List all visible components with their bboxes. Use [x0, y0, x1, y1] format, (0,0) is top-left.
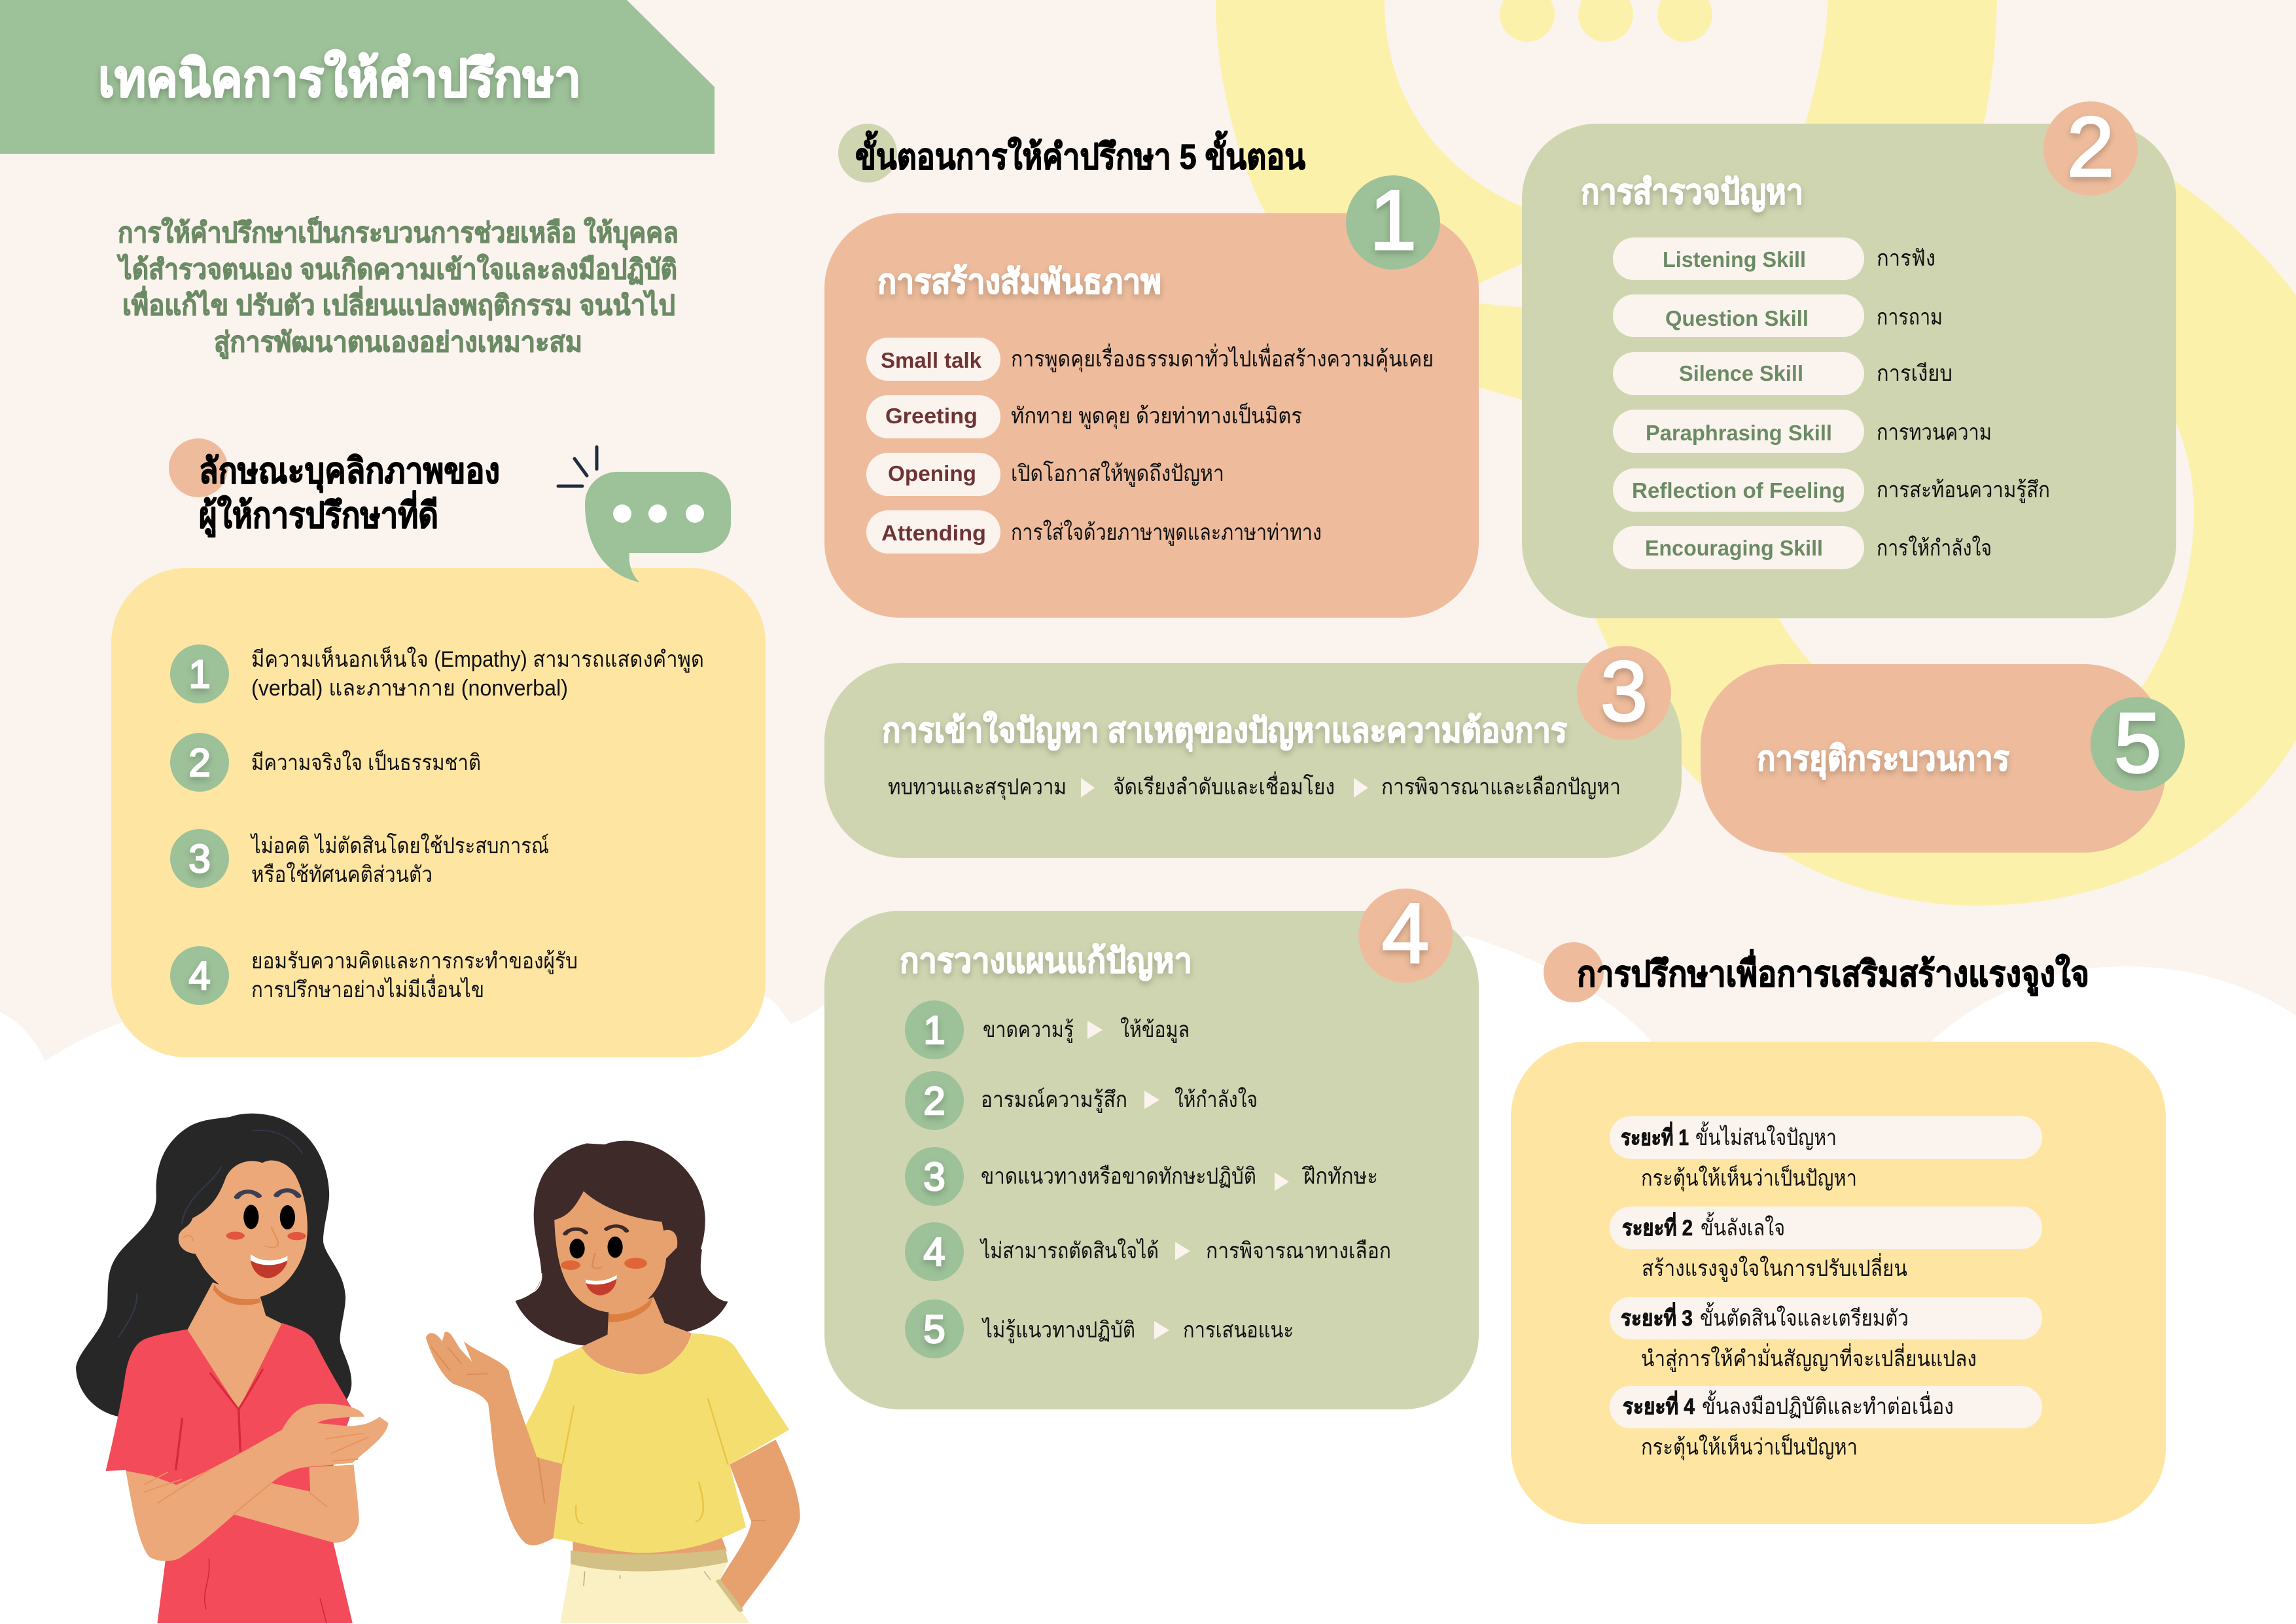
background: cream area with cloud edge	[0, 0, 2296, 1112]
stage 1: กระตุ้นให้เห็นว่าเป็นปัญหา	[1641, 1165, 1857, 1192]
item 1: 1	[188, 652, 211, 696]
step 2 rows: การทวนความ	[1877, 420, 1992, 445]
panel: step 1	[824, 172, 1479, 618]
intro paragraph: สู่การพัฒนาตนเองอย่างเหมาะสม	[214, 327, 582, 359]
stage 1: ระยะที่ 1	[1621, 1121, 1689, 1150]
item 3: หรือใช้ทัศนคติส่วนตัว	[251, 862, 433, 887]
panel: step 5	[1701, 664, 2185, 853]
item 3	[170, 829, 549, 888]
step 3 badge	[1577, 643, 1671, 740]
row 3	[905, 1147, 1378, 1206]
item 4: 4	[188, 954, 211, 998]
step 2 rows: การให้กำลังใจ	[1877, 535, 1992, 561]
intro paragraph: เพื่อแก้ไข ปรับตัว เปลี่ยนแปลงพฤติกรรม จนนำไป	[122, 286, 675, 321]
row 4	[905, 1222, 1391, 1281]
item 3: ไม่อคติ ไม่ตัดสินโดยใช้ประสบการณ์	[249, 833, 549, 858]
row 3: ขาดแนวทางหรือขาดทักษะปฏิบัติ	[981, 1164, 1256, 1189]
step 2 rows: Silence Skill	[1679, 361, 1803, 385]
item 2: 2	[188, 741, 211, 785]
step 3 flow: การพิจารณาและเลือกปัญหา	[1381, 775, 1621, 800]
heading: good counsellor traits	[169, 438, 500, 537]
item 1: (verbal) และภาษากาย (nonverbal)	[251, 676, 568, 701]
row 4: ไม่สามารถตัดสินใจได้	[979, 1238, 1159, 1263]
stage 2: ระยะที่ 2	[1622, 1212, 1693, 1241]
step 2 rows: Question Skill	[1665, 306, 1809, 330]
panel: step 2	[1522, 99, 2176, 618]
woman in red dress	[76, 1114, 389, 1623]
row 5: 5	[923, 1307, 945, 1351]
step 2 rows	[1613, 238, 2050, 569]
row 2	[905, 1071, 1258, 1130]
step 1 rows: Attending	[881, 521, 986, 545]
row 5: ไม่รู้แนวทางปฏิบัติ	[981, 1317, 1135, 1343]
heading: five-step process	[838, 124, 1305, 183]
stage 3: ระยะที่ 3	[1621, 1302, 1693, 1331]
heading: motivation counselling: การปรึกษาเพื่อการเสริมสร้างแรงจูงใจ	[1577, 949, 2089, 996]
step 2 badge: 2	[2067, 99, 2114, 194]
stage 1: ขั้นไม่สนใจปัญหา	[1695, 1121, 1837, 1150]
step 2 badge	[2043, 99, 2138, 196]
stage 2	[1610, 1207, 2042, 1282]
item 4	[170, 946, 578, 1005]
step 3 flow: ทบทวนและสรุปความ	[888, 775, 1067, 800]
woman in yellow shirt	[426, 1141, 800, 1623]
step 3 flow	[888, 771, 1621, 800]
step 3 heading: การเข้าใจปัญหา สาเหตุของปัญหาและความต้องการ	[882, 711, 1567, 752]
heading: good counsellor traits: ลักษณะบุคลิกภาพของ	[199, 451, 500, 493]
step 2 rows: Listening Skill	[1663, 247, 1806, 272]
row 1	[905, 1000, 1190, 1059]
step 1 rows: การใส่ใจด้วยภาษาพูดและภาษาท่าทาง	[1011, 520, 1322, 546]
heading: five-step process: ขั้นตอนการให้คำปรึกษา 5 ขั้นตอน	[855, 131, 1305, 177]
row 2: อารมณ์ความรู้สึก	[981, 1087, 1127, 1113]
stage 3: นำสู่การให้คำมั่นสัญญาที่จะเปลี่ยนแปลง	[1641, 1343, 1977, 1372]
row 5	[905, 1299, 1294, 1358]
item 2: มีความจริงใจ เป็นธรรมชาติ	[251, 749, 481, 775]
item 1	[170, 644, 704, 703]
row 1: ขาดความรู้	[983, 1017, 1074, 1043]
item 4: การปรึกษาอย่างไม่มีเงื่อนไข	[251, 974, 484, 1002]
title: เทคนิคการให้คำปรึกษา	[98, 49, 581, 107]
row 2: ให้กำลังใจ	[1174, 1087, 1258, 1112]
step 2 rows: การถาม	[1877, 305, 1943, 330]
step 3 flow: จัดเรียงลำดับและเชื่อมโยง	[1113, 771, 1335, 800]
step 4 badge	[1358, 885, 1453, 983]
row 1: ให้ข้อมูล	[1120, 1017, 1190, 1043]
step 1 rows: เปิดโอกาสให้พูดถึงปัญหา	[1011, 461, 1224, 487]
intro paragraph: ได้สำรวจตนเอง จนเกิดความเข้าใจและลงมือปฏิบัติ	[116, 253, 677, 285]
item 1: มีความเห็นอกเห็นใจ (Empathy) สามารถแสดงคำพูด	[251, 646, 704, 673]
step 1 rows	[866, 338, 1434, 554]
item 2	[170, 733, 481, 792]
step 2 rows: การเงียบ	[1877, 361, 1952, 386]
panel: motivation stages	[1511, 1042, 2166, 1524]
step 1 badge: 1	[1369, 172, 1417, 268]
item 3: 3	[188, 837, 211, 881]
intro paragraph: การให้คำปรึกษาเป็นกระบวนการช่วยเหลือ ให้บุคคล	[118, 216, 679, 250]
step 3 badge: 3	[1600, 643, 1648, 739]
title banner	[0, 0, 715, 154]
step 4 badge: 4	[1382, 885, 1429, 981]
intro paragraph	[116, 216, 679, 359]
step 2 rows: การฟัง	[1877, 246, 1935, 271]
decorative yellow shapes	[1216, 0, 2296, 906]
row 4: 4	[923, 1230, 945, 1274]
step 2 heading: การสำรวจปัญหา	[1581, 173, 1803, 212]
heading: motivation counselling	[1544, 942, 2089, 1002]
row 1: 1	[923, 1008, 945, 1052]
step 5 heading: การยุติกระบวนการ	[1757, 740, 2009, 780]
panel: step 4	[824, 885, 1479, 1409]
stage 4: กระตุ้นให้เห็นว่าเป็นปัญหา	[1641, 1434, 1858, 1460]
step 2 rows: การสะท้อนความรู้สึก	[1877, 478, 2050, 503]
panel: good counsellor traits	[111, 568, 766, 1057]
panel: step 3	[824, 643, 1682, 858]
step 2 rows: Encouraging Skill	[1645, 536, 1823, 560]
stage 2: ขั้นลังเลใจ	[1701, 1212, 1785, 1241]
stage 4: ขั้นลงมือปฏิบัติและทำต่อเนื่อง	[1702, 1390, 1954, 1419]
step 5 badge	[2091, 695, 2185, 791]
step 1 rows: Opening	[888, 461, 976, 485]
step 2 rows: Reflection of Feeling	[1632, 478, 1845, 503]
icon: speech bubble	[558, 447, 731, 582]
step 1 heading: การสร้างสัมพันธภาพ	[877, 263, 1161, 301]
row 3: 3	[923, 1155, 945, 1199]
step 4 heading: การวางแผนแก้ปัญหา	[900, 942, 1192, 981]
stage 3: ขั้นตัดสินใจและเตรียมตัว	[1700, 1302, 1909, 1331]
row 3: ฝึกทักษะ	[1301, 1164, 1378, 1189]
stage 2: สร้างแรงจูงใจในการปรับเปลี่ยน	[1642, 1253, 1907, 1282]
stage 4	[1610, 1386, 2042, 1460]
step 1 badge	[1346, 172, 1440, 270]
illustration: two women talking	[76, 1114, 800, 1623]
step 1 rows: ทักทาย พูดคุย ด้วยท่าทางเป็นมิตร	[1011, 402, 1302, 429]
stage 1	[1610, 1116, 2042, 1192]
step 5 badge: 5	[2114, 695, 2161, 790]
heading: good counsellor traits: ผู้ให้การปรึกษาที่ดี	[199, 490, 438, 537]
row 4: การพิจารณาทางเลือก	[1206, 1239, 1391, 1263]
step 1 rows: Small talk	[881, 348, 982, 372]
item 4: ยอมรับความคิดและการกระทำของผู้รับ	[251, 949, 578, 974]
stage 3	[1610, 1297, 2042, 1372]
row 5: การเสนอแนะ	[1183, 1318, 1294, 1343]
stage 4: ระยะที่ 4	[1623, 1390, 1695, 1419]
row 2: 2	[923, 1079, 945, 1123]
step 1 rows: Greeting	[885, 404, 978, 428]
step 1 rows: การพูดคุยเรื่องธรรมดาทั่วไปเพื่อสร้างความคุ้นเคย	[1011, 344, 1434, 372]
step 2 rows: Paraphrasing Skill	[1646, 421, 1832, 445]
